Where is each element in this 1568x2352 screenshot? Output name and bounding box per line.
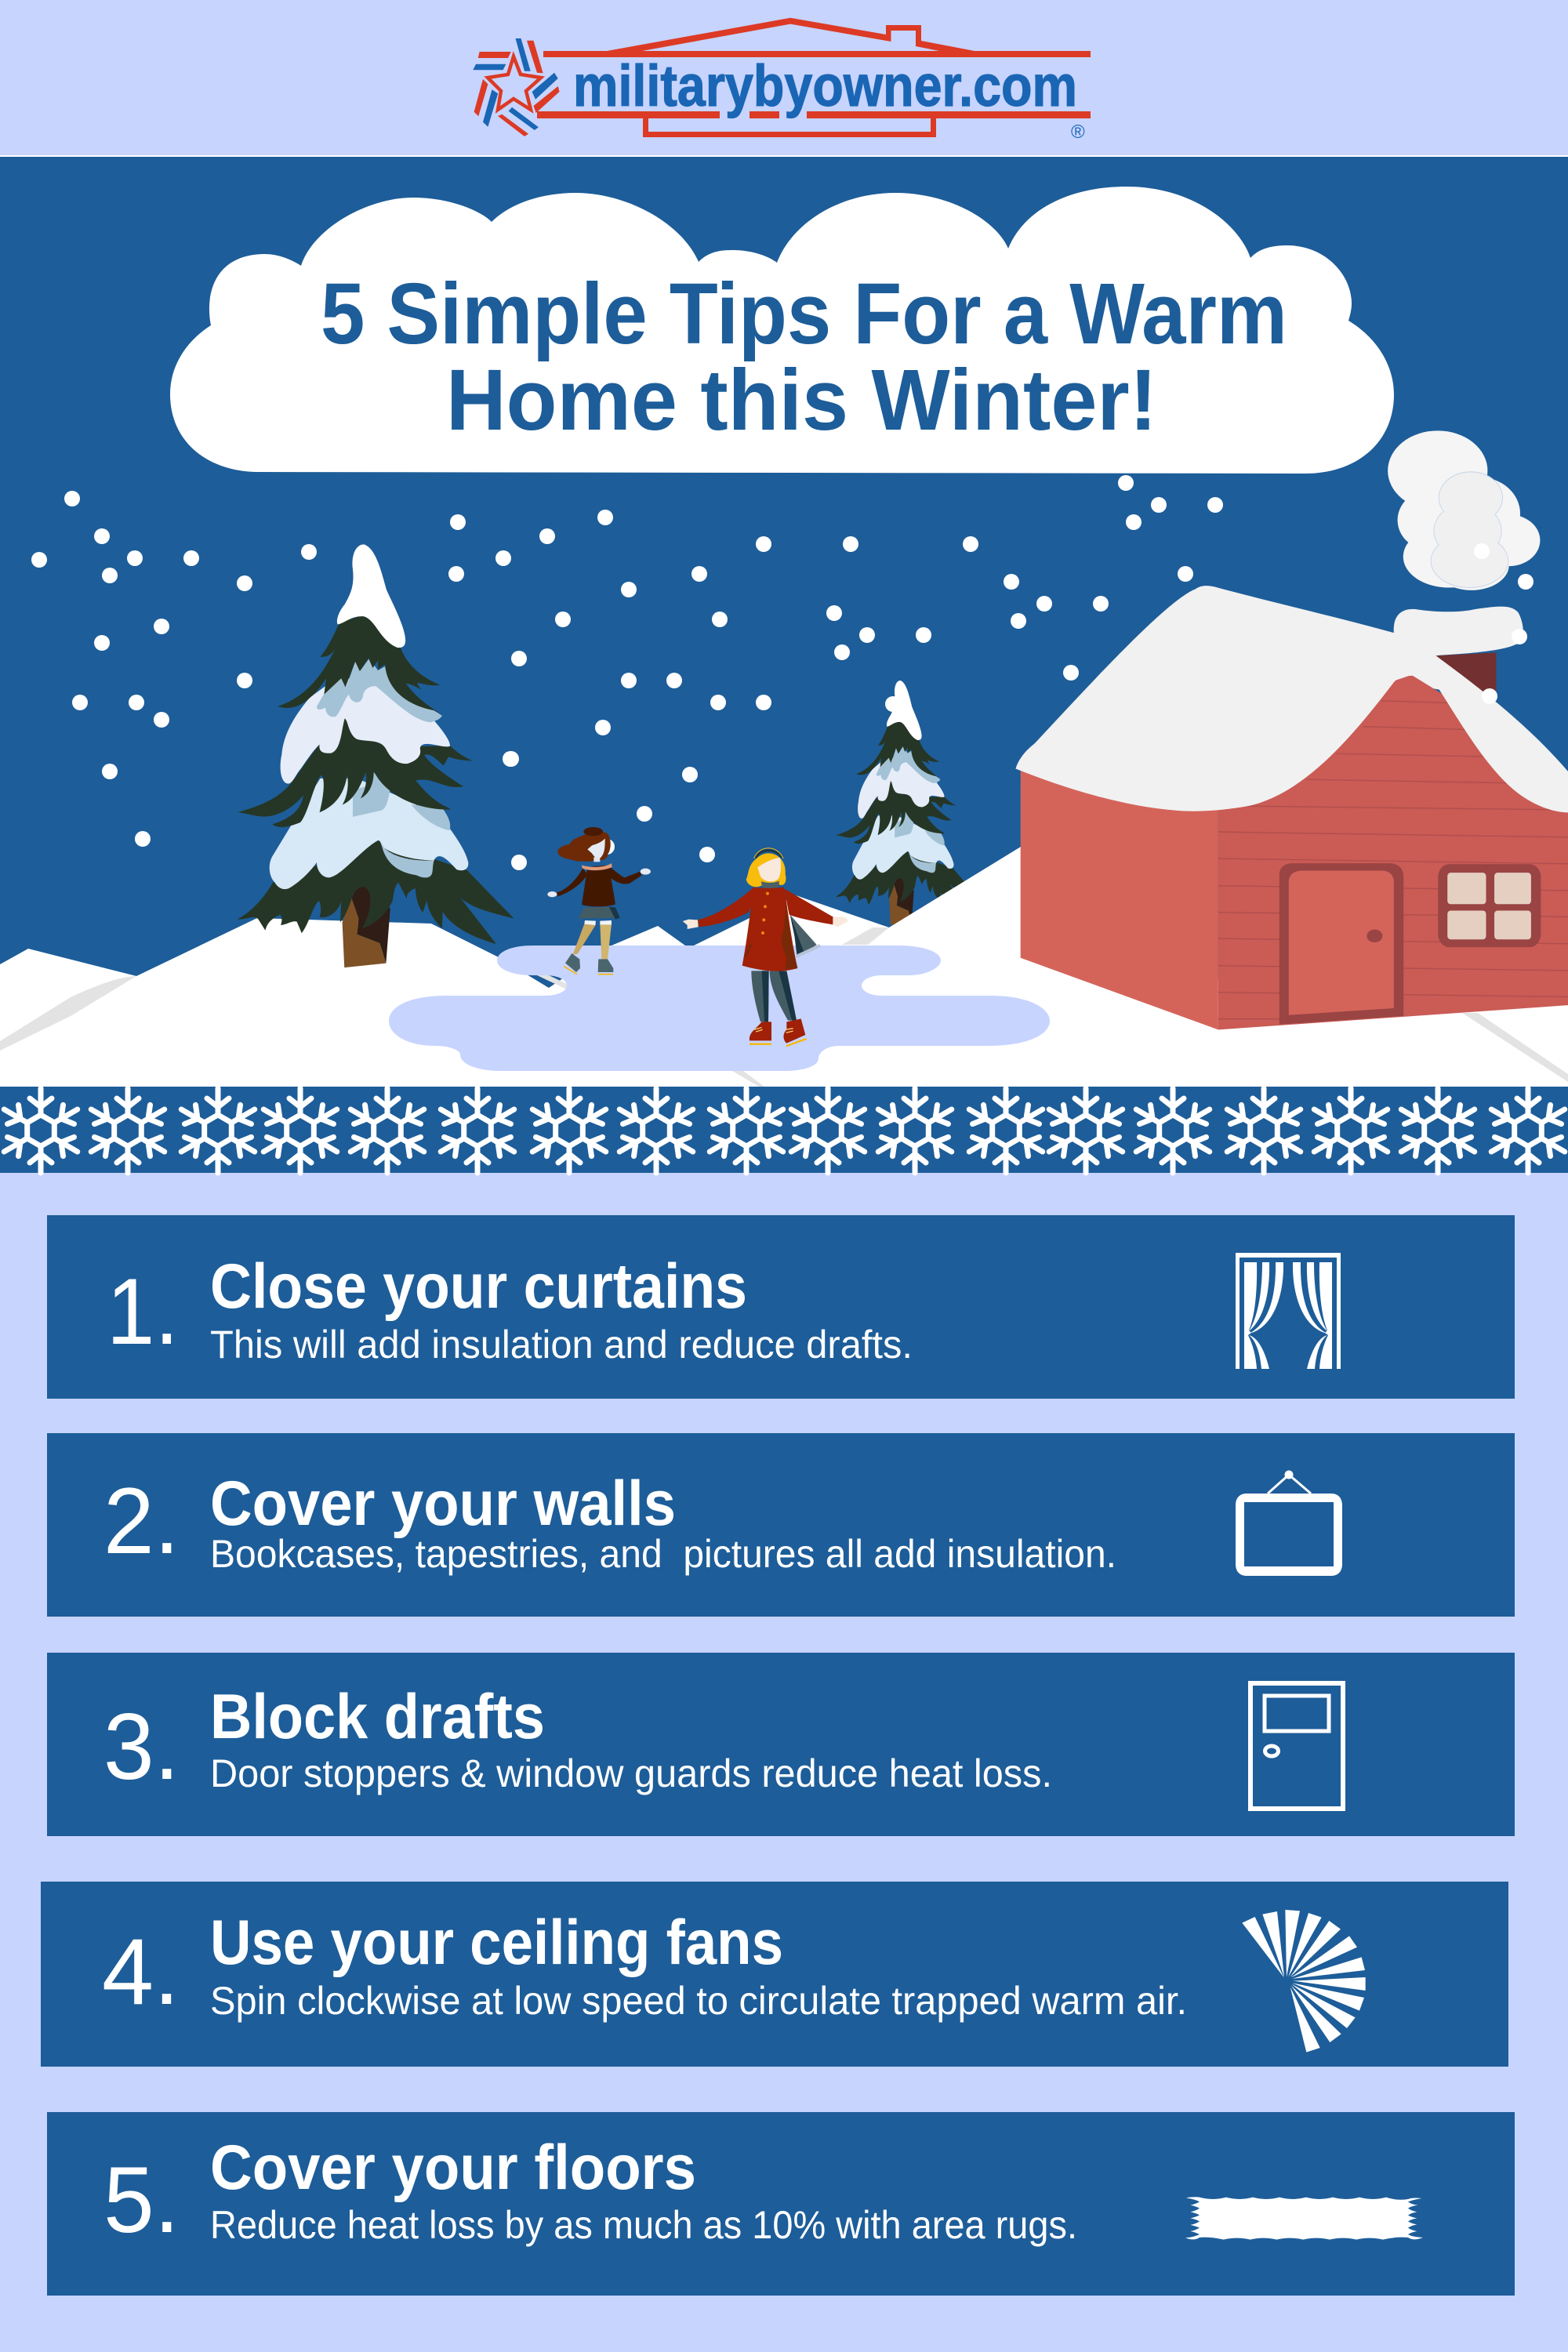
- big pine tree: [238, 544, 514, 967]
- description 5: Reduce heat loss by as much as 10% with area rugs.: [210, 2203, 1077, 2247]
- back snow hills: [0, 895, 1021, 1087]
- icon: ceiling fan: [1242, 1910, 1366, 2053]
- logo: militarybyowner.com: [473, 18, 1091, 143]
- heading 3: Block drafts: [210, 1682, 545, 1752]
- panel: tip 2 cover your walls: [47, 1433, 1515, 1617]
- icon: area rug: [1185, 2197, 1423, 2240]
- number 2: 2.: [103, 1468, 180, 1573]
- panel: winter scene: [0, 157, 1568, 1087]
- icon: door: [1250, 1683, 1343, 1809]
- panel: tip 5 cover your floors: [47, 2112, 1515, 2296]
- icon: curtains: [1236, 1253, 1341, 1369]
- smoke: [1388, 430, 1540, 590]
- front snow slope: [784, 847, 1568, 1087]
- icon: framed picture: [1236, 1471, 1342, 1576]
- house: [1015, 430, 1568, 1029]
- registered mark: ®: [1071, 122, 1085, 143]
- number 5: 5.: [103, 2147, 180, 2252]
- logo star with stripes: [473, 38, 560, 136]
- small pine tree: [836, 681, 977, 924]
- door: [1279, 863, 1403, 1025]
- house left wall: [1021, 770, 1218, 1029]
- heading 5: Cover your floors: [210, 2132, 696, 2203]
- number 4: 4.: [102, 1919, 180, 2024]
- number 3: 3.: [103, 1694, 180, 1799]
- title cloud: [170, 187, 1394, 474]
- logo wordmark: militarybyowner.com: [573, 53, 1077, 118]
- title: 5 Simple Tips For a Warm: [321, 266, 1287, 362]
- skater: girl in brown sweater: [547, 827, 651, 975]
- logo house outline: [537, 18, 1091, 137]
- heading 4: Use your ceiling fans: [210, 1907, 783, 1978]
- heading 2: Cover your walls: [210, 1468, 676, 1539]
- frozen pond: [389, 946, 1050, 1071]
- panel: tip 1 close your curtains: [47, 1215, 1515, 1399]
- snow dots over house: [1474, 543, 1527, 704]
- panel: tip 4 use your ceiling fans: [41, 1882, 1508, 2067]
- snow shadows: [0, 927, 1568, 1087]
- chimney: [1436, 652, 1496, 699]
- title: [321, 266, 1287, 448]
- title: Home this Winter!: [446, 352, 1157, 448]
- skater: girl in red coat: [683, 848, 848, 1046]
- description 1: This will add insulation and reduce drafts.: [210, 1323, 913, 1367]
- house front wall: [1218, 675, 1568, 1029]
- description 4: Spin clockwise at low speed to circulate trapped warm air.: [210, 1979, 1187, 2023]
- snowfall dots: [31, 475, 1534, 870]
- description 3: Door stoppers & window guards reduce heat loss.: [210, 1751, 1052, 1795]
- roof snow: [1015, 586, 1568, 823]
- window: [1438, 864, 1541, 947]
- snowflake border: [0, 1087, 1568, 1173]
- heading 1: Close your curtains: [210, 1251, 747, 1322]
- description 2: Bookcases, tapestries, and pictures all add insulation.: [210, 1532, 1116, 1576]
- number 1: 1.: [107, 1259, 179, 1364]
- panel: tip 3 block drafts: [47, 1653, 1515, 1836]
